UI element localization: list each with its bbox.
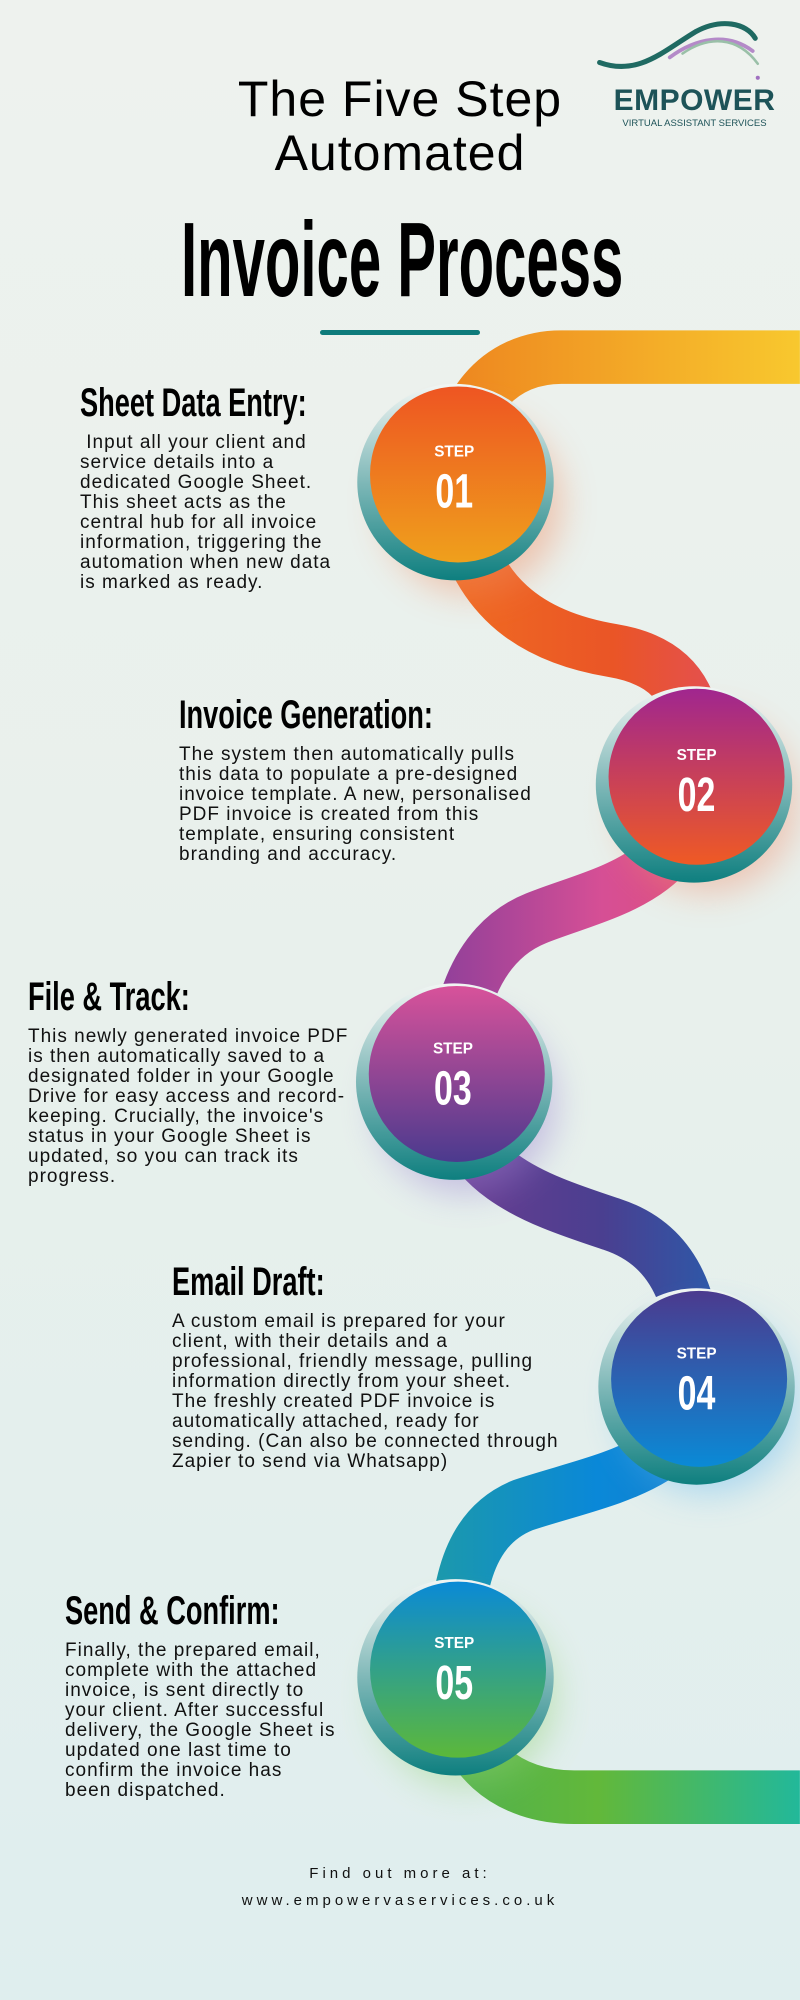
step labels: 05 bbox=[435, 1655, 473, 1709]
panel: step 4 text: Zapier to send via Whatsapp) bbox=[172, 1451, 448, 1472]
panel: step 5 text: your client. After successful bbox=[65, 1700, 324, 1721]
panel: step 1 text: information, triggering the bbox=[80, 532, 322, 553]
step circles bbox=[357, 384, 554, 580]
panel: step 5 text: complete with the attached bbox=[65, 1660, 317, 1681]
panel: step 5 text: Finally, the prepared email, bbox=[65, 1640, 321, 1661]
logo swoosh bbox=[600, 24, 760, 80]
panel: step 4 text bbox=[172, 1260, 559, 1472]
panel: step 5 text: Send & Confirm: bbox=[65, 1589, 280, 1633]
logo text: EMPOWER bbox=[614, 84, 775, 117]
panel: step 1 text: Input all your client and bbox=[86, 432, 307, 453]
panel: step 4 text: The freshly created PDF invoice is bbox=[172, 1391, 495, 1412]
step labels: 04 bbox=[678, 1365, 716, 1420]
panel: step 3 text: Drive for easy access and record- bbox=[28, 1086, 345, 1107]
panel: step 4 text: information directly from your sheet. bbox=[172, 1371, 511, 1392]
panel: step 5 text: updated one last time to bbox=[65, 1740, 292, 1761]
step labels: STEP bbox=[677, 747, 717, 764]
panel: step 3 text: keeping. Crucially, the invoice's bbox=[28, 1106, 324, 1127]
step labels: 02 bbox=[678, 767, 715, 822]
panel: step 4 text: sending. (Can also be connected through bbox=[172, 1431, 559, 1452]
panel: step 3 text: designated folder in your Google bbox=[28, 1066, 335, 1087]
road bbox=[454, 357, 800, 1797]
panel: step 1 text: dedicated Google Sheet. bbox=[80, 472, 312, 493]
step labels: STEP bbox=[433, 1041, 473, 1058]
panel: step 5 text bbox=[65, 1589, 336, 1801]
panel: step 3 text bbox=[28, 975, 348, 1187]
logo text: VIRTUAL ASSISTANT SERVICES bbox=[622, 118, 767, 129]
panel: step 2 text: template, ensuring consistent bbox=[179, 824, 455, 845]
panel: step 2 text: invoice template. A new, personalised bbox=[179, 784, 532, 805]
title: Invoice Process: Invoice Process bbox=[181, 201, 623, 319]
panel: step 5 text: delivery, the Google Sheet is bbox=[65, 1720, 336, 1741]
step labels: STEP bbox=[677, 1345, 717, 1362]
panel: step 4 text: A custom email is prepared for your bbox=[172, 1311, 506, 1332]
panel: step 1 text: service details into a bbox=[80, 452, 274, 473]
panel: step 2 text bbox=[179, 693, 532, 865]
panel: step 4 text: professional, friendly message, pulling bbox=[172, 1351, 533, 1372]
panel: step 5 text: confirm the invoice has bbox=[65, 1760, 282, 1781]
panel: step 2 text: The system then automatically pulls bbox=[179, 744, 515, 765]
step labels: STEP bbox=[434, 444, 474, 461]
panel: step 1 text: central hub for all invoice bbox=[80, 512, 317, 533]
title: The Five Step bbox=[238, 71, 562, 127]
glows bbox=[376, 415, 797, 1786]
panel: step 1 text: Sheet Data Entry: bbox=[80, 381, 307, 425]
step labels: 03 bbox=[434, 1061, 472, 1115]
panel: step 2 text: branding and accuracy. bbox=[179, 844, 397, 865]
step labels: 01 bbox=[435, 464, 473, 518]
panel: step 2 text: Invoice Generation: bbox=[179, 693, 433, 737]
panel: step 3 text: is then automatically saved to a bbox=[28, 1046, 325, 1067]
panel: step 2 text: this data to populate a pre-designed bbox=[179, 764, 518, 785]
panel: step 3 text: File & Track: bbox=[28, 975, 190, 1019]
panel: step 1 text: automation when new data bbox=[80, 552, 331, 573]
panel: step 2 text: PDF invoice is created from this bbox=[179, 804, 479, 825]
step labels: STEP bbox=[434, 1635, 474, 1652]
footer bbox=[242, 1865, 558, 1909]
footer: www.empowervaservices.co.uk bbox=[242, 1892, 558, 1909]
panel: step 1 text bbox=[80, 381, 331, 593]
panel: step 4 text: Email Draft: bbox=[172, 1260, 325, 1304]
panel: step 5 text: been dispatched. bbox=[65, 1780, 226, 1801]
panel: step 1 text: This sheet acts as the bbox=[80, 492, 287, 513]
panel: step 3 text: status in your Google Sheet is bbox=[28, 1126, 311, 1147]
title: Automated bbox=[275, 125, 525, 181]
panel: step 4 text: automatically attached, ready for bbox=[172, 1411, 480, 1432]
panel: step 3 text: updated, so you can track its bbox=[28, 1146, 299, 1167]
panel: step 3 text: This newly generated invoice PDF bbox=[28, 1026, 348, 1047]
panel: step 5 text: invoice, is sent directly to bbox=[65, 1680, 304, 1701]
footer: Find out more at: bbox=[309, 1865, 491, 1882]
title bbox=[238, 71, 562, 181]
step labels bbox=[433, 444, 717, 1709]
panel: step 4 text: client, with their details and a bbox=[172, 1331, 448, 1352]
panel: step 3 text: progress. bbox=[28, 1166, 116, 1187]
panel: step 1 text: is marked as ready. bbox=[80, 572, 263, 593]
